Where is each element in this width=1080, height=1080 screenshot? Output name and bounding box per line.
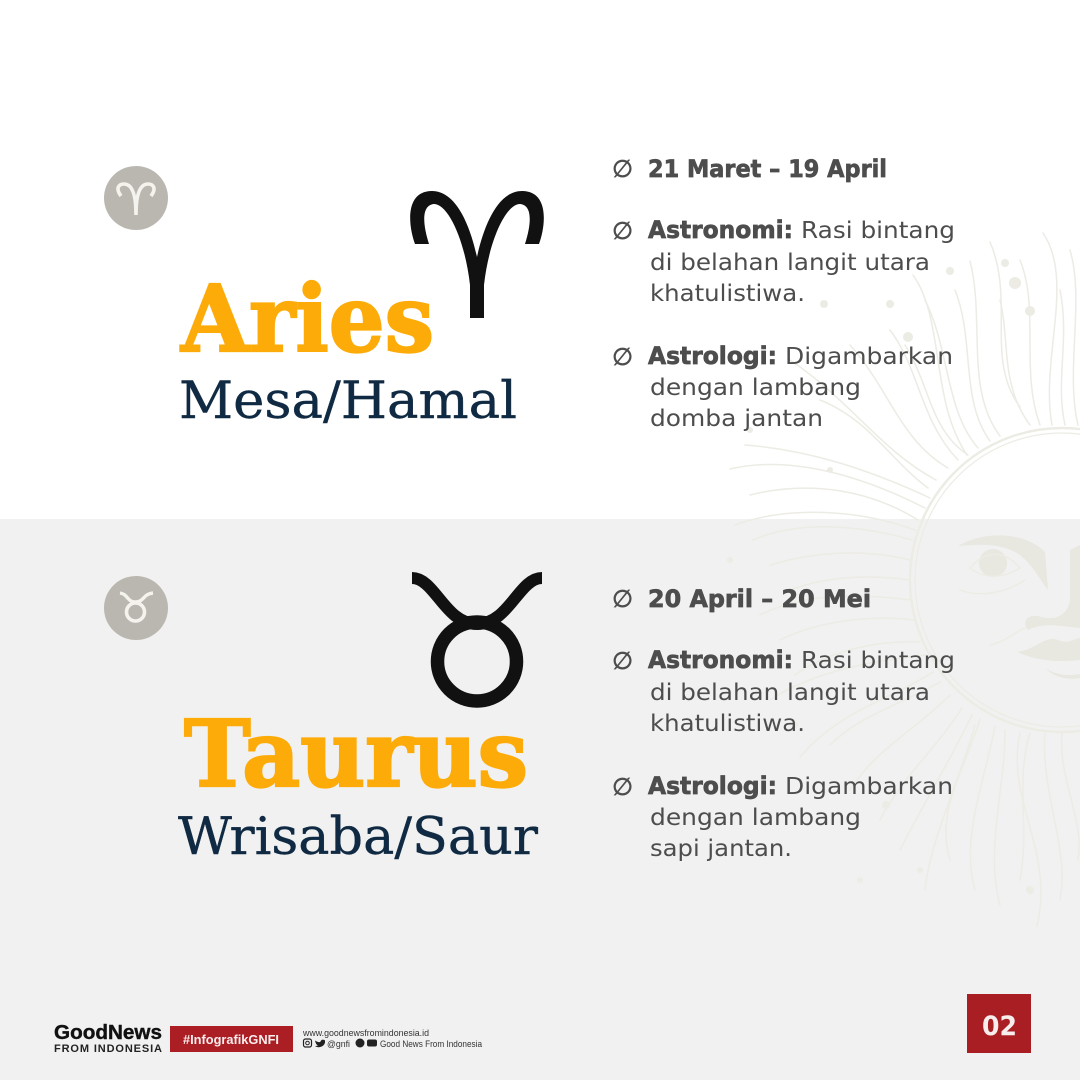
footer contact links	[302, 1028, 483, 1050]
subheading: Wrisaba/Saur: Wrisaba/Saur	[178, 808, 539, 867]
page number badge: 02	[982, 1011, 1017, 1042]
taurus astrology: Astrologi:	[648, 772, 777, 800]
aries astrology: ∅	[612, 343, 633, 371]
footer contact links: www.goodnewsfromindonesia.id	[302, 1028, 429, 1039]
subheading: Mesa/Hamal: Mesa/Hamal	[179, 372, 517, 431]
taurus astrology: Digambarkan	[785, 774, 953, 800]
taurus facts	[612, 585, 955, 862]
taurus date: 20 April – 20 Mei	[648, 585, 871, 613]
taurus date: ∅	[612, 585, 633, 613]
sun face	[958, 535, 1080, 679]
footer contact links: @gnfi	[327, 1039, 350, 1050]
footer contact links: Good News From Indonesia	[380, 1039, 483, 1050]
taurus astrology: dengan lambang	[650, 805, 861, 831]
aries astrology	[612, 342, 953, 432]
heading: Aries: Aries	[180, 265, 434, 373]
footer logo: GoodNews From Indonesia: FROM INDONESIA	[54, 1043, 162, 1055]
footer logo: GoodNews From Indonesia	[54, 1022, 162, 1055]
page number badge	[967, 994, 1031, 1053]
footer hashtag badge: #InfografikGNFI	[183, 1033, 279, 1047]
icon: aries small badge	[104, 166, 168, 230]
aries astrology: Digambarkan	[785, 344, 953, 370]
sun illustration watermark	[727, 233, 1080, 926]
aries date: 21 Maret – 19 April	[648, 155, 887, 183]
icon: taurus small badge	[104, 576, 168, 640]
panel: aries background	[0, 0, 1080, 519]
aries astronomy: di belahan langit utara	[650, 250, 930, 276]
icon: instagram	[304, 1039, 312, 1047]
taurus astrology: sapi jantan.	[650, 836, 792, 862]
taurus astronomy: khatulistiwa.	[650, 711, 805, 737]
heading: Taurus: Taurus	[184, 700, 528, 808]
footer logo: GoodNews From Indonesia: GoodNews	[54, 1022, 162, 1044]
aries astronomy: Rasi bintang	[801, 218, 955, 244]
aries astrology: domba jantan	[650, 406, 823, 432]
icon: youtube	[367, 1040, 377, 1046]
aries facts	[612, 155, 955, 432]
aries date: ∅	[612, 155, 633, 183]
icon: twitter	[315, 1040, 325, 1047]
taurus astronomy: Astronomi:	[648, 646, 793, 674]
footer hashtag badge	[170, 1026, 293, 1052]
panel: taurus background	[0, 519, 1080, 1080]
aries astronomy: ∅	[612, 217, 633, 245]
aries astronomy: Astronomi:	[648, 216, 793, 244]
sun specks	[727, 259, 1035, 894]
aries astronomy	[612, 216, 955, 307]
taurus astronomy: di belahan langit utara	[650, 680, 930, 706]
taurus astronomy: ∅	[612, 647, 633, 675]
aries astrology: Astrologi:	[648, 342, 777, 370]
sun disc rim	[910, 428, 1080, 732]
aries astrology: dengan lambang	[650, 375, 861, 401]
taurus astrology: ∅	[612, 773, 633, 801]
taurus astrology	[612, 772, 953, 862]
icon: taurus large symbol	[412, 578, 542, 701]
icon: facebook	[356, 1038, 364, 1048]
aries astronomy: khatulistiwa.	[650, 281, 805, 307]
icon: aries large symbol	[410, 191, 544, 318]
taurus astronomy	[612, 646, 955, 737]
taurus astronomy: Rasi bintang	[801, 648, 955, 674]
